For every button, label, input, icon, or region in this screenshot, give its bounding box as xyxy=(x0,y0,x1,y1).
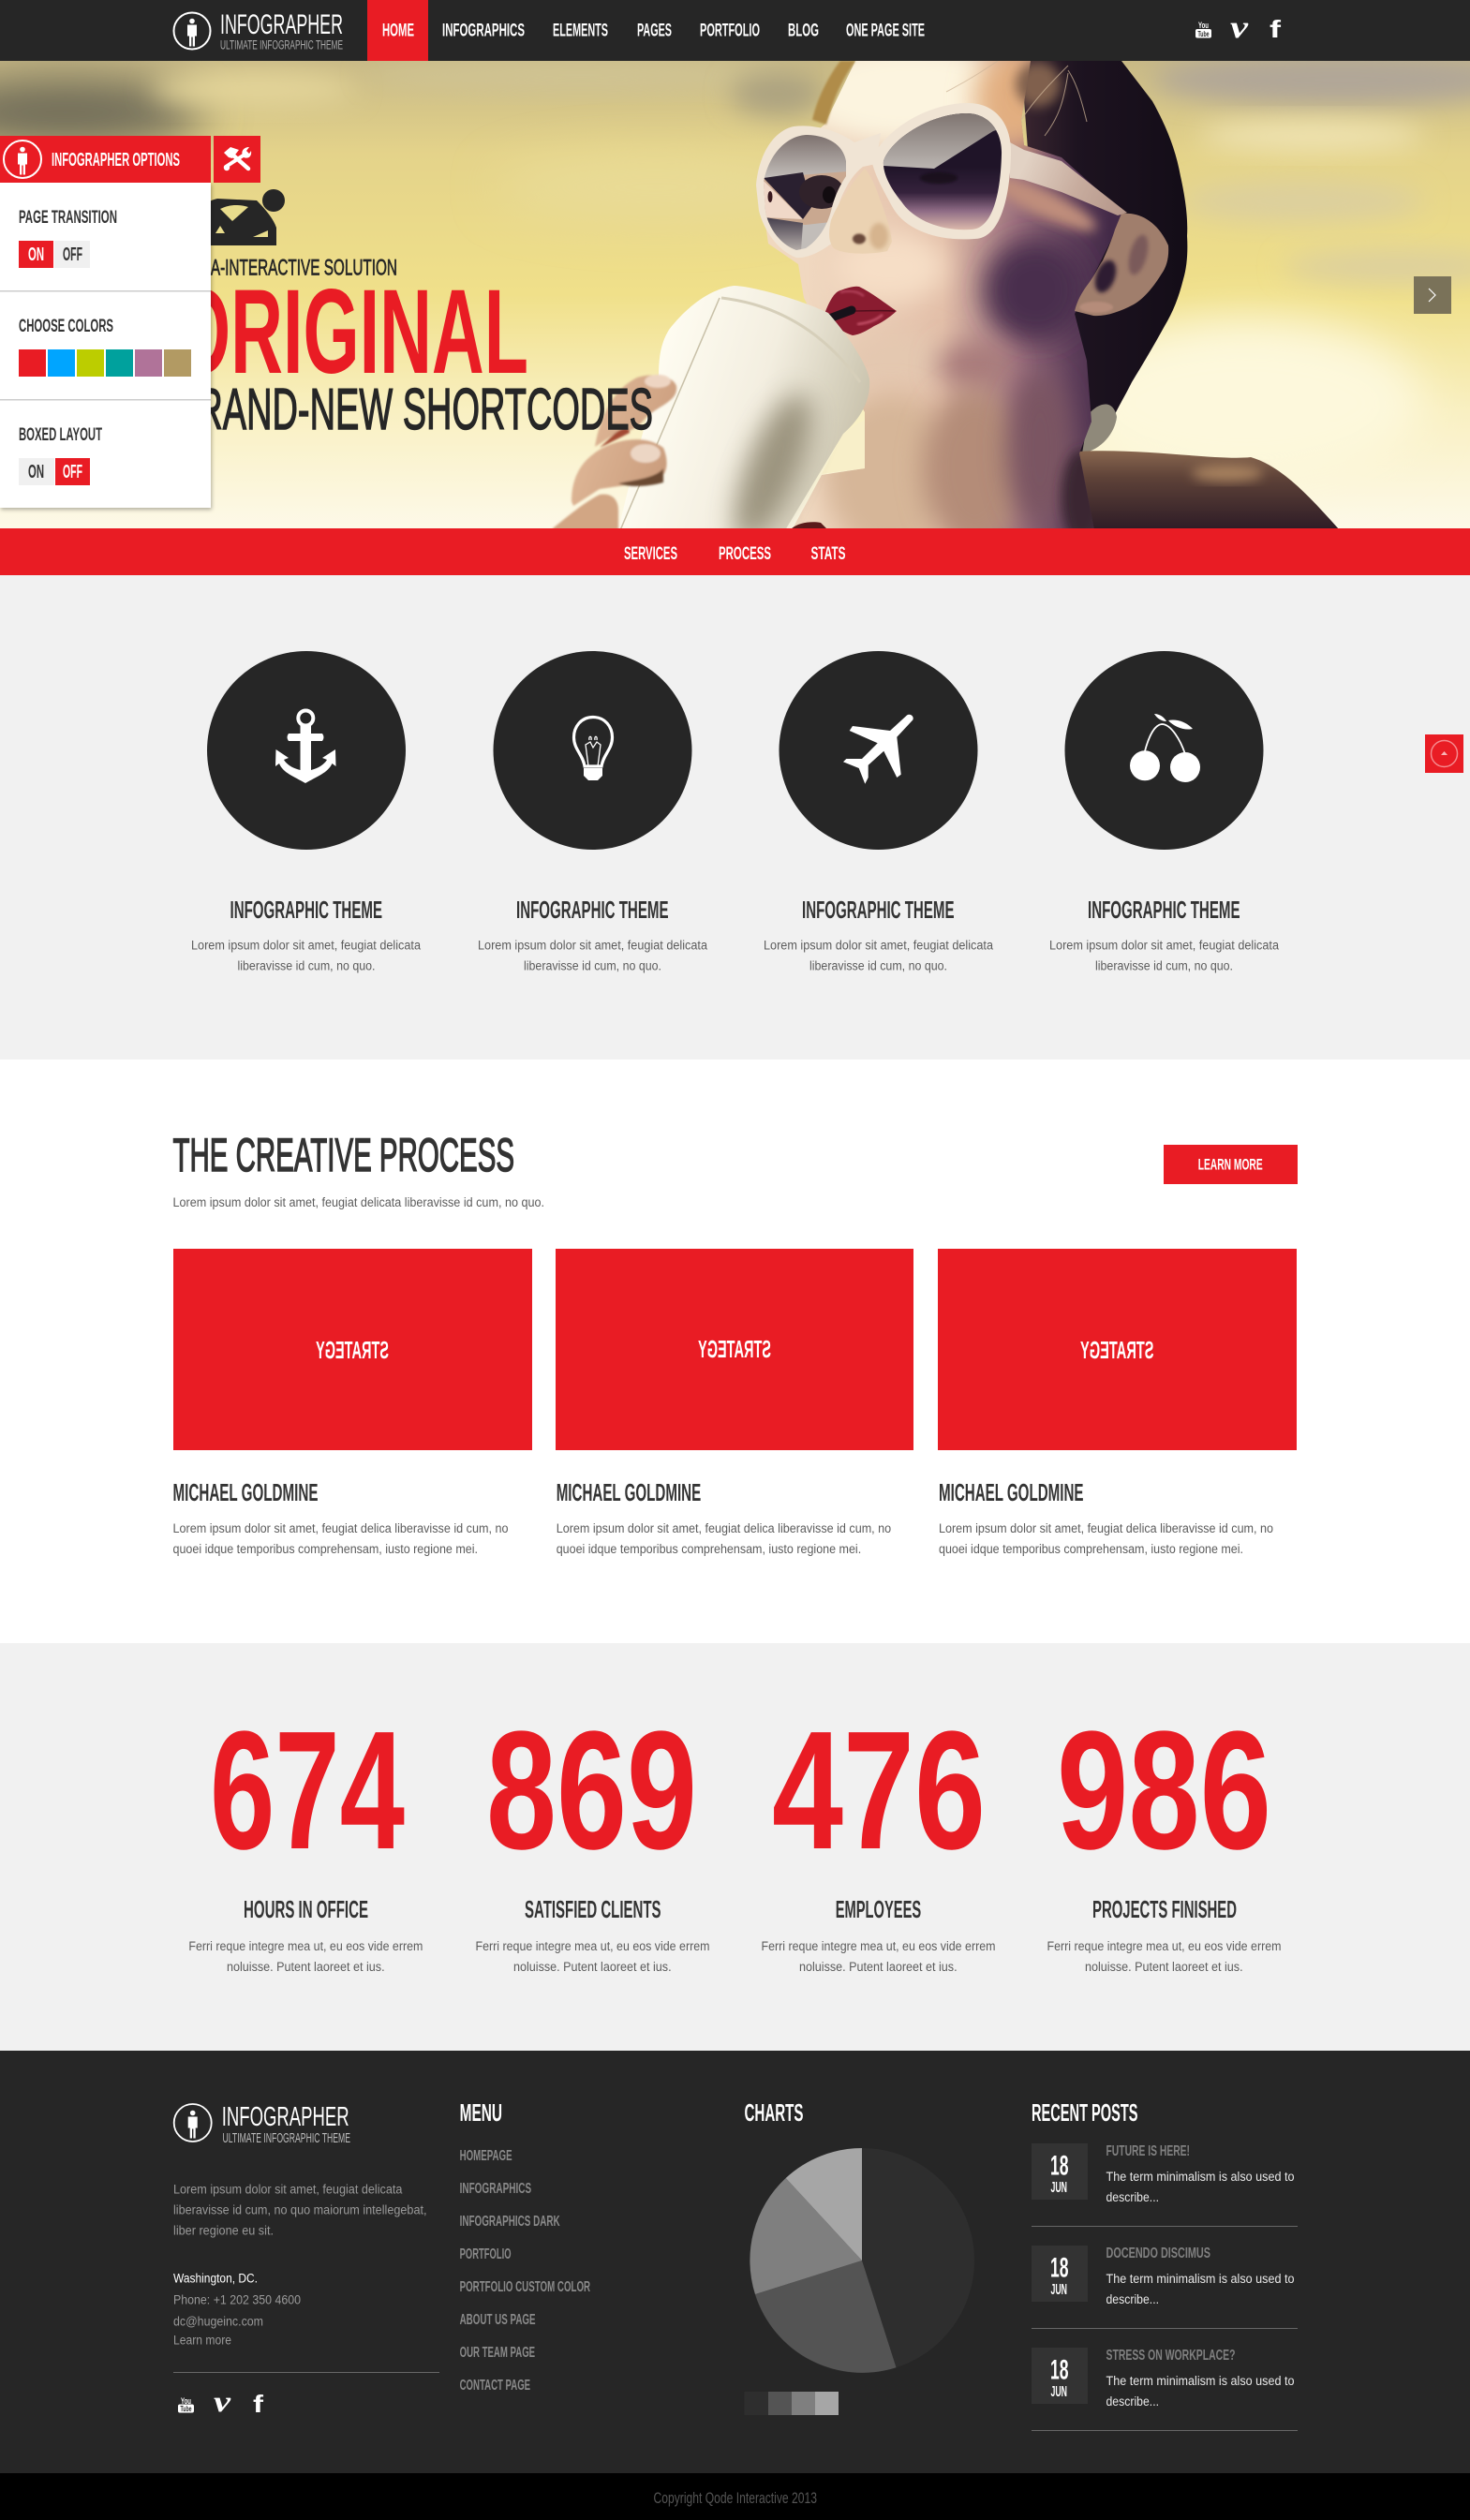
colour picker: CHOOSE COLORS xyxy=(19,317,113,336)
process card 1: STRATEGY xyxy=(316,1336,389,1364)
shoulder xyxy=(1077,451,1340,530)
stat: projects finished: noluisse. Putent laoreet et ius. xyxy=(1085,1960,1243,1974)
service 3: airplane: liberavisse id cum, no quo. xyxy=(809,959,947,972)
post 2: JUN xyxy=(1051,2282,1067,2298)
hero image: woman drinking from a cup against a yellow sky xyxy=(0,42,1470,553)
footer social icons: v xyxy=(214,2384,231,2418)
header social icons: f xyxy=(1270,15,1281,43)
footer menu column: MENU xyxy=(460,2098,502,2127)
navigation xyxy=(382,21,925,41)
services section background xyxy=(0,575,1470,1060)
slider next arrow xyxy=(1414,276,1451,314)
sky patch between cup and neck xyxy=(822,458,865,474)
stat: hours in office xyxy=(188,1697,423,1974)
pie chart xyxy=(750,2148,974,2373)
face and neck xyxy=(766,61,1121,528)
section nav strip: SERVICES xyxy=(624,543,677,564)
process card 3 xyxy=(938,1249,1297,1556)
stat: employees xyxy=(761,1697,995,1974)
temple arm of sunglasses xyxy=(1010,142,1127,215)
process section background xyxy=(0,1060,1470,1643)
footer about text: Lorem ipsum dolor sit amet, feugiat delicata xyxy=(173,2183,403,2196)
hand and fingers xyxy=(553,375,676,530)
colour picker xyxy=(19,317,191,377)
copyright bar: Copyright Qode Interactive 2013 xyxy=(654,2489,817,2507)
navigation: ELEMENTS xyxy=(553,21,608,41)
sunglasses left lens xyxy=(756,126,881,258)
stat: employees: Ferri reque integre mea ut, eu eos vide errem xyxy=(761,1939,995,1953)
footer menu column xyxy=(460,2098,590,2394)
footer brand column: Learn more xyxy=(173,2333,231,2348)
process card 2 xyxy=(556,1249,913,1556)
icon: light bulb xyxy=(573,718,613,780)
service 3: airplane: INFOGRAPHIC THEME xyxy=(802,896,954,924)
service 1: anchor: liberavisse id cum, no quo. xyxy=(238,959,375,972)
stat: projects finished xyxy=(1047,1697,1282,1974)
service 4: cherries xyxy=(1049,651,1279,972)
navigation: PORTFOLIO xyxy=(700,21,760,41)
post 1: describe... xyxy=(1106,2190,1159,2204)
stats section background xyxy=(0,1643,1470,2051)
service 2: light bulb: Lorem ipsum dolor sit amet, feugiat delicata xyxy=(478,939,707,952)
boxed layout setting xyxy=(19,425,102,485)
service 3: airplane xyxy=(764,651,993,972)
logo: INFOGRAPHER xyxy=(220,9,343,40)
post 2: describe... xyxy=(1106,2292,1159,2306)
stat: projects finished: 986 xyxy=(1057,1697,1271,1885)
stat: hours in office: 674 xyxy=(210,1697,405,1885)
footer logo: INFOGRAPHER xyxy=(222,2102,349,2132)
footer menu column: HOMEPAGE xyxy=(460,2148,512,2164)
post 3: The term minimalism is also used to xyxy=(1106,2374,1295,2388)
process card 3: Lorem ipsum dolor sit amet, feugiat delica liberavisse id cum, no xyxy=(939,1521,1273,1535)
header social icons: v xyxy=(1230,10,1249,45)
post 3: describe... xyxy=(1106,2394,1159,2409)
ear xyxy=(1075,214,1168,316)
stat: satisfied clients: noluisse. Putent laoreet et ius. xyxy=(513,1960,672,1974)
footer background xyxy=(0,2051,1470,2473)
service 4: cherries: liberavisse id cum, no quo. xyxy=(1095,959,1233,972)
service 2: light bulb xyxy=(478,651,707,972)
post 3: STRESS ON WORKPLACE? xyxy=(1106,2348,1235,2364)
post 1: FUTURE IS HERE! xyxy=(1106,2143,1190,2159)
stat: satisfied clients: 869 xyxy=(486,1697,697,1885)
panel body xyxy=(0,183,211,508)
navigation: INFOGRAPHICS xyxy=(442,21,525,41)
sunglasses right lens xyxy=(871,103,1011,239)
stat: employees: 476 xyxy=(772,1697,986,1885)
navigation: PAGES xyxy=(637,21,672,41)
service 1: anchor xyxy=(191,651,421,972)
post 2 xyxy=(1032,2246,1298,2329)
post 1 xyxy=(1032,2143,1298,2227)
hair xyxy=(1021,61,1187,453)
logo: ULTIMATE INFOGRAPHIC THEME xyxy=(220,37,343,52)
process card 2: STRATEGY xyxy=(698,1335,771,1363)
back to top button xyxy=(1425,734,1463,773)
footer logo: ULTIMATE INFOGRAPHIC THEME xyxy=(223,2130,350,2146)
post 1: JUN xyxy=(1051,2180,1067,2196)
boxed layout setting: BOXED LAYOUT xyxy=(19,425,102,445)
copyright bar xyxy=(0,2473,1470,2520)
footer social icons: Tube xyxy=(180,2405,192,2413)
footer brand column: dc@hugeinc.com xyxy=(173,2314,263,2329)
boxed layout setting: ON xyxy=(28,462,44,482)
header bar xyxy=(0,0,1470,61)
logo xyxy=(174,9,343,52)
panel logo xyxy=(4,141,41,178)
process card 3: STRATEGY xyxy=(1080,1336,1154,1364)
process card 1: quoei idque temporibus comprehensam, iusto regione mei. xyxy=(172,1542,478,1556)
post 2: 18 xyxy=(1050,2253,1068,2284)
hero kicker icon: bent figure, partly behind the options panel xyxy=(184,189,285,245)
nose xyxy=(829,200,892,254)
section nav strip: STATS xyxy=(811,543,845,564)
hero subheadline: BRAND-NEW SHORTCODES xyxy=(173,378,653,442)
tools toggle icon xyxy=(214,136,260,183)
service 4: cherries: Lorem ipsum dolor sit amet, feugiat delicata xyxy=(1049,939,1279,952)
hero kicker text: ULTRA-INTERACTIVE SOLUTION xyxy=(174,255,397,281)
stat: satisfied clients xyxy=(476,1697,710,1974)
footer brand column: Phone: +1 202 350 4600 xyxy=(173,2293,301,2306)
post 1: The term minimalism is also used to xyxy=(1106,2170,1295,2184)
footer menu column: PORTFOLIO xyxy=(460,2246,512,2262)
post 2: The term minimalism is also used to xyxy=(1106,2272,1295,2286)
page transition setting: PAGE TRANSITION xyxy=(19,208,117,228)
service 2: light bulb: INFOGRAPHIC THEME xyxy=(516,896,669,924)
boxed layout setting: OFF xyxy=(63,462,82,482)
stat: satisfied clients: SATISFIED CLIENTS xyxy=(525,1895,661,1923)
footer menu column: INFOGRAPHICS DARK xyxy=(460,2214,560,2230)
panel title: INFOGRAPHER OPTIONS xyxy=(52,150,180,170)
icon: cherries xyxy=(1130,714,1200,782)
process card 2: Lorem ipsum dolor sit amet, feugiat delica liberavisse id cum, no xyxy=(557,1521,891,1535)
service 1: anchor: Lorem ipsum dolor sit amet, feugiat delicata xyxy=(191,939,421,952)
page transition setting xyxy=(19,208,117,268)
lips xyxy=(824,287,897,335)
navigation: ONE PAGE SITE xyxy=(846,21,925,41)
stat: hours in office: Ferri reque integre mea ut, eu eos vide errem xyxy=(188,1939,423,1953)
cup xyxy=(618,286,869,552)
service 3: airplane: Lorem ipsum dolor sit amet, feugiat delicata xyxy=(764,939,993,952)
stat: hours in office: HOURS IN OFFICE xyxy=(244,1895,368,1923)
section nav strip xyxy=(0,528,1470,575)
header social icons xyxy=(1195,10,1281,45)
icon: anchor xyxy=(275,710,335,783)
process card 1: Lorem ipsum dolor sit amet, feugiat delica liberavisse id cum, no xyxy=(172,1521,508,1535)
footer menu column: ABOUT US PAGE xyxy=(460,2312,536,2328)
stat: satisfied clients: Ferri reque integre mea ut, eu eos vide errem xyxy=(476,1939,710,1953)
process card 2: MICHAEL GOLDMINE xyxy=(557,1478,701,1506)
header social icons: You xyxy=(1198,21,1209,30)
post 3: 18 xyxy=(1050,2355,1068,2386)
post 2: DOCENDO DISCIMUS xyxy=(1106,2246,1210,2261)
process card 2: quoei idque temporibus comprehensam, iusto regione mei. xyxy=(557,1542,861,1556)
panel header xyxy=(0,136,211,183)
footer menu column: INFOGRAPHICS xyxy=(460,2181,531,2197)
footer charts column xyxy=(744,2098,974,2415)
process intro: Lorem ipsum dolor sit amet, feugiat delicata liberavisse id cum, no quo. xyxy=(172,1195,544,1209)
chart legend xyxy=(744,2392,839,2415)
footer logo xyxy=(174,2102,350,2146)
footer menu column: CONTACT PAGE xyxy=(460,2378,530,2394)
process card 3: MICHAEL GOLDMINE xyxy=(939,1478,1083,1506)
footer recent posts column xyxy=(1032,2098,1298,2431)
process card 3: quoei idque temporibus comprehensam, iusto regione mei. xyxy=(939,1542,1243,1556)
process card 1: MICHAEL GOLDMINE xyxy=(172,1478,319,1506)
service 2: light bulb: liberavisse id cum, no quo. xyxy=(524,959,661,972)
hero headline: ORIGINAL xyxy=(174,265,528,399)
process card 1 xyxy=(172,1249,532,1556)
footer charts column: CHARTS xyxy=(744,2098,804,2127)
footer contact: Washington, DC. xyxy=(173,2271,258,2286)
post 3: JUN xyxy=(1051,2384,1067,2400)
navigation: HOME xyxy=(382,21,414,41)
service 4: cherries: INFOGRAPHIC THEME xyxy=(1088,896,1240,924)
service 1: anchor: INFOGRAPHIC THEME xyxy=(230,896,382,924)
active nav tab xyxy=(367,0,428,61)
footer social icons xyxy=(178,2384,263,2418)
footer brand column: liberavisse id cum, no quo maiorum intellegebat, xyxy=(173,2203,427,2216)
dark garment at the bottom of the neck xyxy=(792,522,826,528)
stat: hours in office: noluisse. Putent laoreet et ius. xyxy=(227,1960,385,1974)
stat: projects finished: Ferri reque integre mea ut, eu eos vide errem xyxy=(1047,1939,1282,1953)
page transition setting: ON xyxy=(28,245,44,265)
stat: employees: noluisse. Putent laoreet et ius. xyxy=(799,1960,958,1974)
page transition setting: OFF xyxy=(63,245,82,265)
learn more button xyxy=(1164,1145,1298,1184)
footer brand column: liber regione eu sit. xyxy=(173,2224,274,2237)
post 3 xyxy=(1032,2348,1298,2431)
header social icons: Tube xyxy=(1197,30,1210,38)
footer menu column: OUR TEAM PAGE xyxy=(460,2345,535,2361)
footer menu column: PORTFOLIO CUSTOM COLOR xyxy=(460,2279,590,2295)
footer brand column xyxy=(173,2102,439,2418)
options panel xyxy=(0,136,260,508)
post 1: 18 xyxy=(1050,2151,1068,2182)
footer recent posts column: RECENT POSTS xyxy=(1032,2098,1137,2127)
section nav strip: PROCESS xyxy=(719,543,771,564)
footer social icons: f xyxy=(253,2390,263,2418)
stat: employees: EMPLOYEES xyxy=(836,1895,921,1923)
process heading: THE CREATIVE PROCESS xyxy=(172,1129,514,1181)
stat: projects finished: PROJECTS FINISHED xyxy=(1092,1895,1237,1923)
learn more button: LEARN MORE xyxy=(1198,1157,1263,1174)
footer social icons: You xyxy=(181,2396,191,2406)
icon: airplane xyxy=(843,715,913,784)
navigation: BLOG xyxy=(788,21,819,41)
soft hairline and loose strands xyxy=(812,61,1087,136)
